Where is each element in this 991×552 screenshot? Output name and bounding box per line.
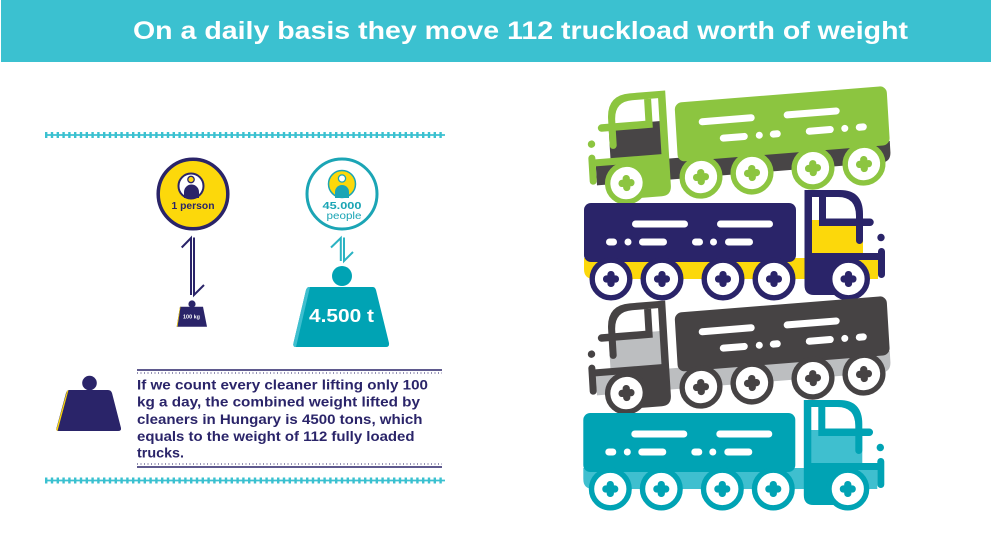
truck: green — [585, 73, 892, 205]
top plus divider — [45, 134, 445, 136]
truck: grey — [585, 283, 892, 415]
text block: equals to the weight of 112 fully loaded — [137, 429, 414, 444]
icon: 100 kg weight: 100 kg — [183, 314, 200, 320]
people badge: 45.000 people: people — [326, 211, 362, 222]
icon: person avatar — [178, 174, 204, 198]
icon: people avatar — [328, 170, 356, 198]
arrow: person to 100 kg — [182, 238, 204, 295]
label: 1 person: 1 person — [172, 201, 214, 212]
arrow: people to 4.500 t — [331, 238, 353, 261]
icon: 4.500 t weight — [293, 266, 389, 347]
truck: navy — [584, 190, 885, 298]
icon: 4.500 t weight: 4.500 t — [309, 306, 374, 326]
text block: kg a day, the combined weight lifted by — [137, 395, 421, 410]
text block: cleaners in Hungary is 4500 tons, which — [137, 412, 422, 427]
text block: trucks. — [137, 446, 184, 460]
person badge: 1 person — [158, 159, 228, 229]
icon: 100 kg weight — [177, 300, 207, 327]
text block: If we count every cleaner lifting only 100 — [137, 378, 428, 392]
icon: weight beside text — [56, 376, 121, 431]
title: On a daily basis they move 112 truckload worth of weight — [133, 17, 909, 45]
label: 45.000 people: 45.000 — [322, 200, 362, 212]
text block — [137, 378, 428, 460]
text block frame bottom — [137, 464, 442, 467]
text block frame top — [137, 370, 442, 373]
bottom plus divider — [45, 480, 445, 482]
header banner — [1, 0, 991, 62]
people badge: 45.000 people — [307, 159, 377, 229]
truck: teal — [583, 400, 884, 508]
